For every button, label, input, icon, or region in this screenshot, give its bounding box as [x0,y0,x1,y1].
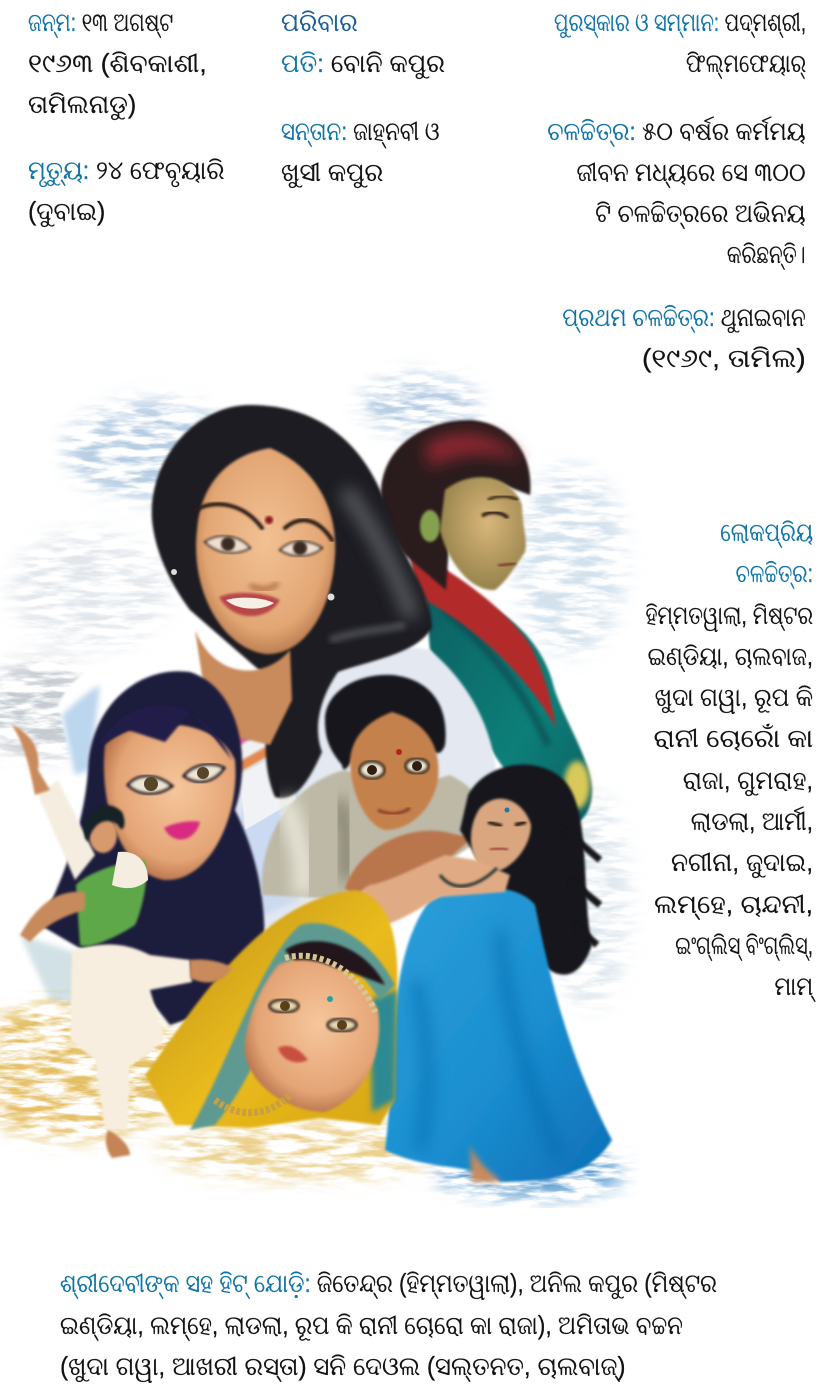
popular films list: ଲମ୍ହେ, ଚାନ୍ଦନୀ, [654,889,813,919]
first film: (୧୯୬୯, ତାମିଲ) [642,343,806,373]
hit pairs paragraph: (ଖୁଦା ଗୱା, ଆଖରୀ ରସ୍ତା) ସନି ଦେଓଲ (ସଲ୍ତନତ, ଚାଲବାଜ୍) [60,1351,626,1381]
family details [281,7,445,188]
film career: ଟି ଚଳଚ୍ଚିତ୍ରରେ ଅଭିନୟ [596,198,806,228]
birth and death details: (ଦୁବାଇ) [28,196,105,226]
film career: ଜୀବନ ମଧ୍ୟରେ ସେ ୩୦୦ [577,157,806,187]
portrait: woman in blue sari [354,765,612,1182]
popular films list: ମାମ୍ [774,971,813,1001]
first film: ପ୍ରଥମ ଚଳଚ୍ଚିତ୍ର: ଥୁନାଇବାନ [563,302,806,332]
first film [563,302,806,373]
portrait: woman with white cap and long hair [20,656,265,1025]
hit pairs paragraph: ଇଣ୍ଡିୟା, ଲମ୍ହେ, ଲାଡଲା, ରୂପ କି ରାନୀ ଚୋରୋ କା ରାଜା), ଅମିତାଭ ବଚ୍ଚନ [60,1310,683,1340]
birth and death details [28,7,224,228]
film career [548,116,806,270]
popular films list: ନଗୀନା, ଜୁଦାଇ, [671,847,813,877]
popular films list: ଇଣ୍ଡିୟା, ଚାଲବାଜ, [648,641,813,671]
popular films list: ଇଂଗ୍ଲିସ୍ ବିଂଗ୍ଲିସ୍, [675,930,813,960]
popular films list: ଲୋକପ୍ରିୟ [720,517,813,547]
birth and death details: ମୃତ୍ୟୁ: ୨୪ ଫେବୃୟାରି [28,155,224,185]
hit pairs paragraph: ଶ୍ରୀଦେବୀଙ୍କ ସହ ହିଟ୍ ଯୋଡ଼ି: ଜିତେନ୍ଦ୍ର (ହିମ୍ମତୱାଲା), ଅନିଲ କପୁର (ମିଷ୍ଟର [60,1268,717,1298]
birth and death details: ୧୯୬୩ (ଶିବକାଶୀ, [28,48,207,78]
popular films list [645,517,816,1002]
popular films list: ଲାଡଲା, ଆର୍ମୀ, [691,806,813,836]
film career: ଚଳଚ୍ଚିତ୍ର: ୫୦ ବର୍ଷର କର୍ମମୟ [548,116,806,146]
portrait: woman in yellow veil [145,890,397,1130]
popular films list: ରାନୀ ଚୋରୋଁ କା [654,723,813,753]
popular films list: ରାଜା, ଗୁମରାହ, [683,765,813,795]
portrait: red-haired woman in scarf [381,420,592,825]
awards: ଫିଲ୍ମଫେୟାର୍ [686,48,806,78]
family details: ଖୁସୀ କପୁର [281,157,383,187]
birth and death details: ଜନ୍ମ: ୧୩ ଅଗଷ୍ଟ [28,7,173,37]
family details: ପରିବାର [281,7,358,37]
watercolour background wash [0,375,630,1198]
family details: ସନ୍ତାନ: ଜାହ୍ନବୀ ଓ [281,116,440,146]
birth and death details: ତାମିଲନାଡୁ) [28,89,136,119]
portrait: central smiling woman [152,405,496,930]
popular films list: ହିମ୍ମତୱାଲା, ମିଷ୍ଟର [645,600,813,630]
portrait: woman with centre parting resting on hand [262,675,484,902]
family details: ପତି: ବୋନି କପୁର [281,48,445,78]
awards [554,7,806,80]
portrait: small dancer in white and green [12,725,232,1158]
popular films list: ଖୁଦା ଗୱା, ରୂପ କି [655,682,813,712]
hit pairs paragraph [60,1268,717,1383]
film career: କରିଛନ୍ତି। [727,239,806,269]
popular films list: ଚଳଚ୍ଚିତ୍ର: [736,558,813,588]
awards: ପୁରସ୍କାର ଓ ସମ୍ମାନ: ପଦ୍ମଶ୍ରୀ, [554,7,806,37]
